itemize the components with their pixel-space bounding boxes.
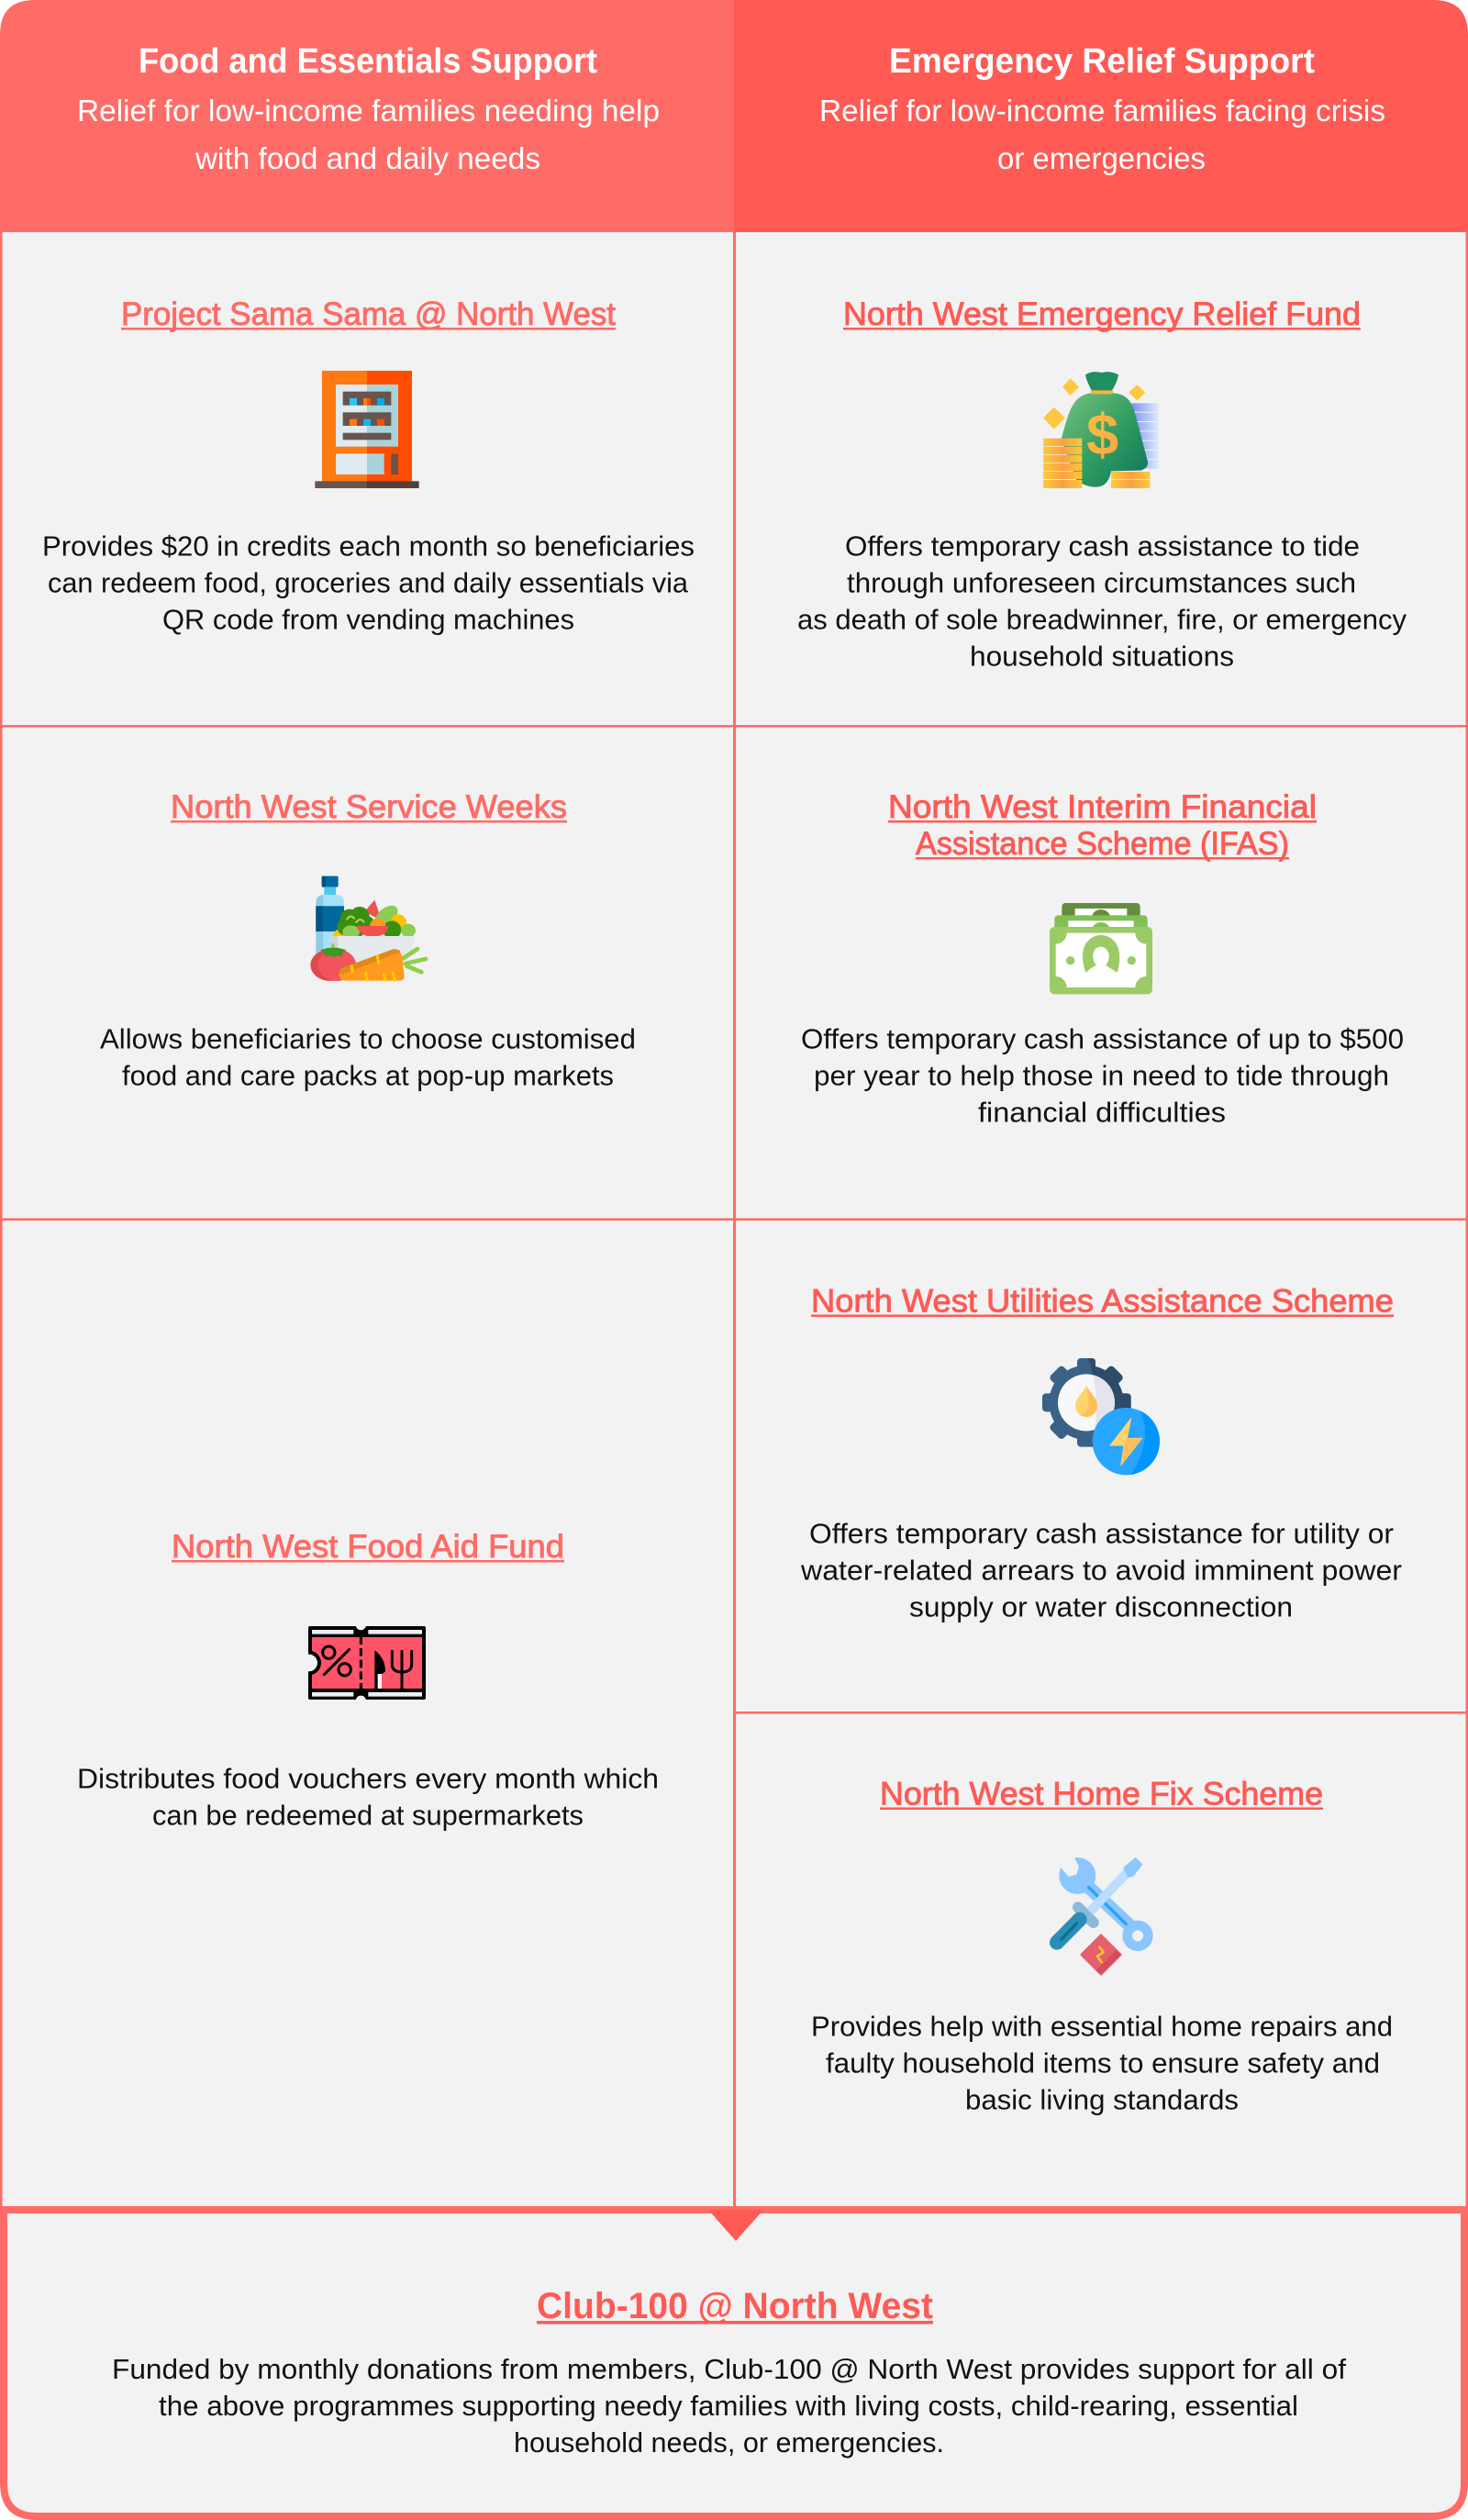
- description: can be redeemed at supermarkets: [152, 1799, 584, 1832]
- panel: home fix scheme: [811, 1777, 1393, 2116]
- icon: gear with water drop and lightning: [1042, 1358, 1160, 1475]
- icon: money bag: $: [1086, 403, 1118, 467]
- description: [811, 2010, 1393, 2116]
- description: can redeem food, groceries and daily essentials via: [48, 567, 689, 598]
- subheading: food and essentials: [77, 94, 660, 175]
- description: faulty household items to ensure safety and: [826, 2046, 1380, 2080]
- description: supply or water disconnection: [909, 1591, 1293, 1622]
- description: food and care packs at pop-up markets: [122, 1059, 614, 1092]
- description: Offers temporary cash assistance to tide: [845, 530, 1360, 562]
- subheading: food and essentials: with food and daily needs: [195, 141, 540, 175]
- description: household needs, or emergencies.: [514, 2426, 944, 2459]
- description: Offers temporary cash assistance of up to $500: [801, 1022, 1404, 1055]
- icon: vending machine: [315, 371, 419, 488]
- subheading: emergency relief: Relief for low-income families facing crisis: [819, 94, 1385, 128]
- card title: Assistance Scheme (IFAS): [916, 826, 1289, 862]
- panel: project sama sama: [42, 296, 695, 635]
- description: Allows beneficiaries to choose customised: [100, 1022, 636, 1055]
- description: the above programmes supporting needy families with living costs, child-rearing, essential: [159, 2390, 1298, 2422]
- icon: groceries: [310, 876, 426, 981]
- panel: north west service weeks: [100, 789, 636, 1092]
- panel: club-100: [0, 2206, 1468, 2516]
- card title: North West Utilities Assistance Scheme: [811, 1283, 1394, 1320]
- description: [797, 530, 1407, 672]
- description: as death of sole breadwinner, fire, or emergency: [797, 604, 1407, 635]
- description: water-related arrears to avoid imminent power: [800, 1555, 1402, 1586]
- header: emergency relief support: [734, 0, 1468, 232]
- subheading: emergency relief: [819, 94, 1385, 175]
- description: [42, 530, 695, 635]
- description: QR code from vending machines: [162, 604, 574, 635]
- description: [112, 2353, 1346, 2459]
- heading: emergency relief: Emergency Relief Support: [889, 42, 1315, 81]
- description: per year to help those in need to tide through: [814, 1059, 1389, 1092]
- description: [100, 1022, 636, 1092]
- arrow: pointing to club-100: [708, 2210, 763, 2241]
- card title: Project Sama Sama @ North West: [121, 296, 616, 332]
- icon: wrench and screwdriver: [1057, 1857, 1153, 1975]
- card title: [888, 789, 1317, 862]
- card title: North West Food Aid Fund: [172, 1529, 564, 1565]
- description: [801, 1022, 1404, 1129]
- description: [77, 1762, 659, 1832]
- description: basic living standards: [965, 2083, 1239, 2116]
- description: Offers temporary cash assistance for utility or: [809, 1518, 1394, 1549]
- panel: north west emergency relief fund: [797, 296, 1407, 672]
- panel: utilities assistance scheme: [800, 1283, 1402, 1622]
- card title: Club-100 @ North West: [537, 2286, 933, 2326]
- description: Provides $20 in credits each month so beneficiaries: [42, 530, 695, 562]
- subheading: emergency relief: or emergencies: [997, 141, 1206, 175]
- panel: interim financial assistance scheme: [801, 789, 1404, 1129]
- card title: North West Home Fix Scheme: [880, 1777, 1323, 1812]
- description: Funded by monthly donations from members, Club-100 @ North West provides support for all of: [112, 2353, 1346, 2385]
- description: household situations: [970, 641, 1234, 672]
- heading: food and essentials: Food and Essentials Support: [139, 42, 597, 81]
- card title: North West Service Weeks: [171, 789, 567, 825]
- description: through unforeseen circumstances such: [847, 567, 1356, 598]
- subheading: food and essentials: Relief for low-income families needing help: [77, 94, 660, 128]
- panel: content grid background: [0, 229, 1468, 2210]
- card title: North West Emergency Relief Fund: [843, 296, 1361, 332]
- card title: North West Interim Financial: [888, 789, 1317, 825]
- icon: money bag: [1043, 372, 1159, 488]
- icon: banknotes: [1050, 903, 1152, 994]
- icon: food voucher: [296, 1620, 426, 1706]
- header: food and essentials support: [0, 0, 734, 232]
- panel: north west food aid fund: [77, 1529, 659, 1832]
- description: Provides help with essential home repairs and: [811, 2010, 1393, 2043]
- description: financial difficulties: [978, 1096, 1226, 1129]
- description: Distributes food vouchers every month which: [77, 1762, 659, 1795]
- description: [800, 1518, 1402, 1622]
